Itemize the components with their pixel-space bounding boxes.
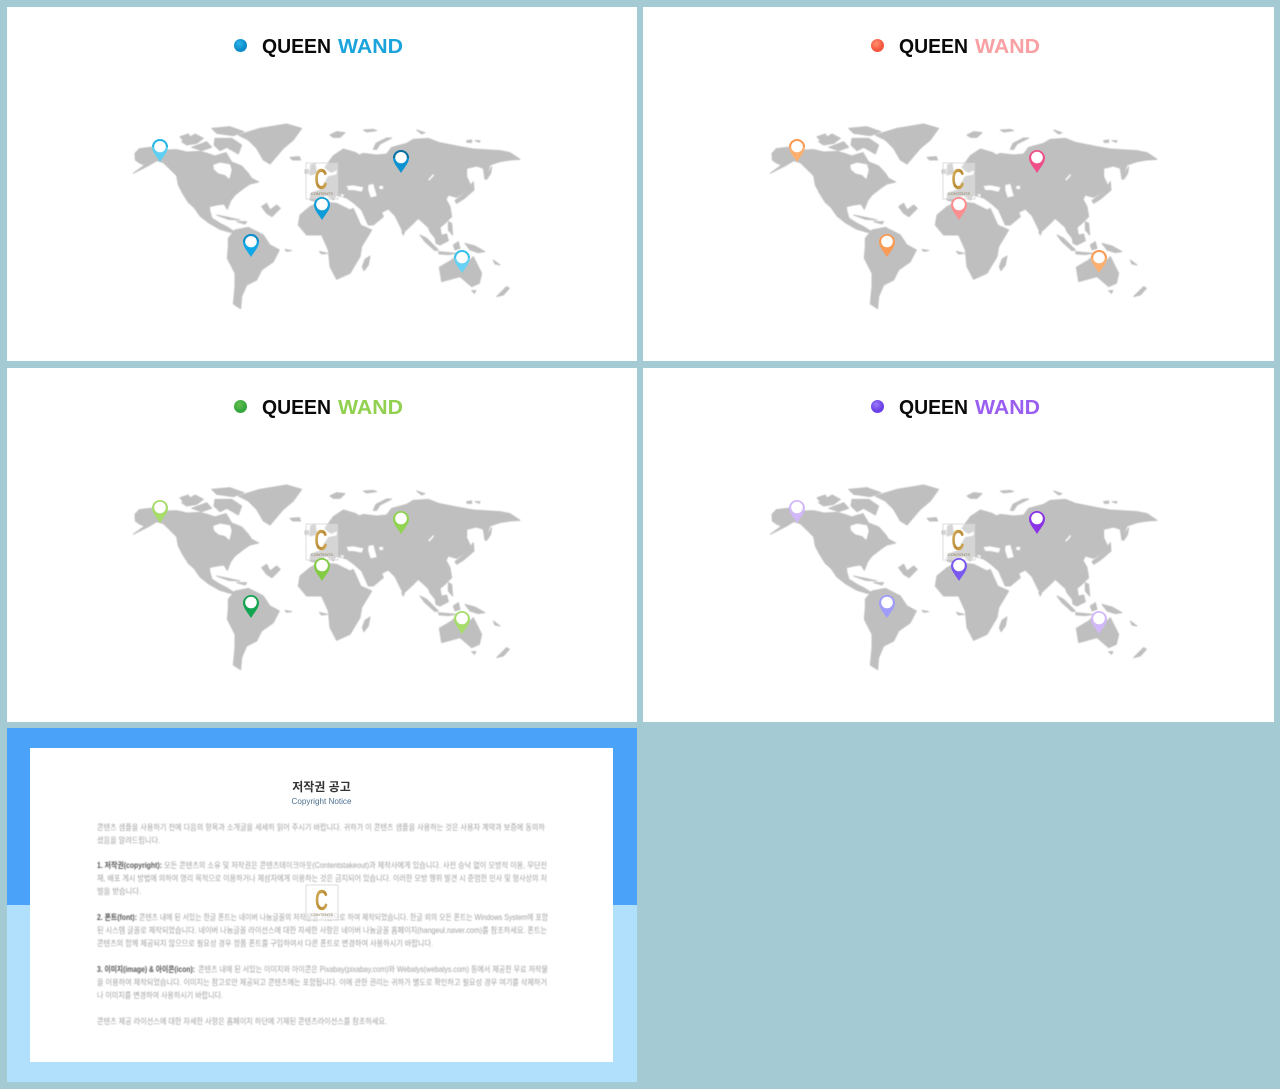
title: purple (871, 397, 1040, 419)
title: green (234, 397, 403, 419)
map pins: green panel (152, 500, 470, 634)
notice body text: 모든 콘텐츠의 소유 및 저작권은 콘텐츠테이크아웃(Contentstakeout)과 제작사에게 있습니다. 사전 승낙 없이 모방적 이용, 무단전 (164, 860, 547, 870)
notice body text: 된 시스템 글꼴로 제작되었습니다. 네이버 나눔글꼴 라이선스에 대한 자세한 사항은 네이버 나눔글꼴 홈페이지(hangeul.naver.com)를 참조하세요. 폰트는 (97, 925, 547, 935)
notice body text: 재, 배포 게시 방법에 의하여 영리 목적으로 이용하거나 제삼자에게 이용하는 것은 금지되어 있습니다. 이러한 모방 행위 발견 시 준엄한 민사 및 형사상의 처 (97, 873, 547, 883)
notice body text: 콘텐츠의 함께 제공되지 않으므로 필요성 경우 정품 폰트를 구입하여서 다른 폰트로 변경하여 사용하시기 바랍니다. (97, 938, 433, 948)
title: blue (234, 36, 403, 58)
watermark: blue panel (306, 163, 338, 199)
notice body text: 콘텐츠 제공 라이선스에 대한 자세한 사항은 홈페이지 하단에 기재된 콘텐츠라이선스를 참조하세요. (97, 1016, 387, 1026)
title: coral: QUEEN (899, 36, 968, 58)
notice body text: 3. 이미지(image) & 아이콘(icon): (97, 964, 195, 974)
heading: copyright notice: Copyright Notice (292, 796, 352, 806)
notice body text: 을 이용하여 제작되었습니다. 이미지는 참고로만 제공되고 콘텐츠에는 포함됩니다. 이에 관한 권리는 귀하가 별도로 확인하고 필요성 경우 여기를 삭제하거 (97, 977, 547, 987)
notice body text: 콘텐츠 내에 된 서있는 한글 폰트는 네이버 나눔글꼴의 저작물을 기반으로 하여 제작되었습니다. 한글 외의 모든 폰트는 Windows System에 포함 (139, 912, 548, 922)
panel: blue map (7, 7, 637, 361)
watermark: copyright panel: CONTENTS (311, 912, 333, 917)
watermark: copyright panel: C (315, 885, 328, 917)
map pins: coral panel (789, 139, 1107, 273)
notice body text (97, 822, 548, 1026)
title: coral (871, 36, 1040, 58)
map pins: blue panel (152, 139, 470, 273)
notice body text: 1. 저작권(copyright): (97, 860, 162, 870)
watermark: copyright panel (306, 885, 338, 920)
heading: copyright notice (292, 779, 352, 806)
panel: purple map (643, 368, 1274, 722)
world map: green panel (133, 485, 520, 670)
notice body text: 2. 폰트(font): (97, 913, 137, 922)
title: blue: QUEEN (262, 36, 331, 58)
world map: blue panel (133, 124, 520, 309)
watermark: coral panel (943, 163, 975, 199)
panel: copyright notice (7, 728, 637, 1082)
title: coral: WAND (975, 36, 1040, 58)
world map: purple panel (770, 485, 1157, 670)
title: blue: WAND (338, 36, 403, 58)
map pins: purple panel (789, 500, 1107, 634)
title: green: QUEEN (262, 397, 331, 419)
notice body text: 벌을 받습니다. (97, 886, 141, 896)
watermark: purple panel (943, 524, 975, 560)
title: green: WAND (338, 397, 403, 419)
notice body text: 나 이미지를 변경하여 사용하시기 바랍니다. (97, 990, 223, 1000)
panel: green map (7, 368, 637, 722)
notice body text: 콘텐츠 샘플을 사용하기 전에 다음의 항목과 소개글을 세세히 읽어 주시기 바랍니다. 귀하가 이 콘텐츠 샘플을 사용하는 것은 사용자 계약과 보증에 동의하 (97, 822, 545, 832)
watermark: green panel (306, 524, 338, 560)
notice body text: 콘텐츠 내에 된 서있는 이미지와 아이콘은 Pixabay(pixabay.com)와 Webalys(webalys.com) 등에서 제공한 무료 저작물 (198, 964, 548, 974)
panel: coral map (643, 7, 1274, 361)
title: purple: QUEEN (899, 397, 968, 419)
heading: copyright notice: 저작권 공고 (292, 779, 351, 794)
title: purple: WAND (975, 397, 1040, 419)
notice body text: 셨음을 알려드립니다. (97, 835, 160, 845)
world map: coral panel (770, 124, 1157, 309)
